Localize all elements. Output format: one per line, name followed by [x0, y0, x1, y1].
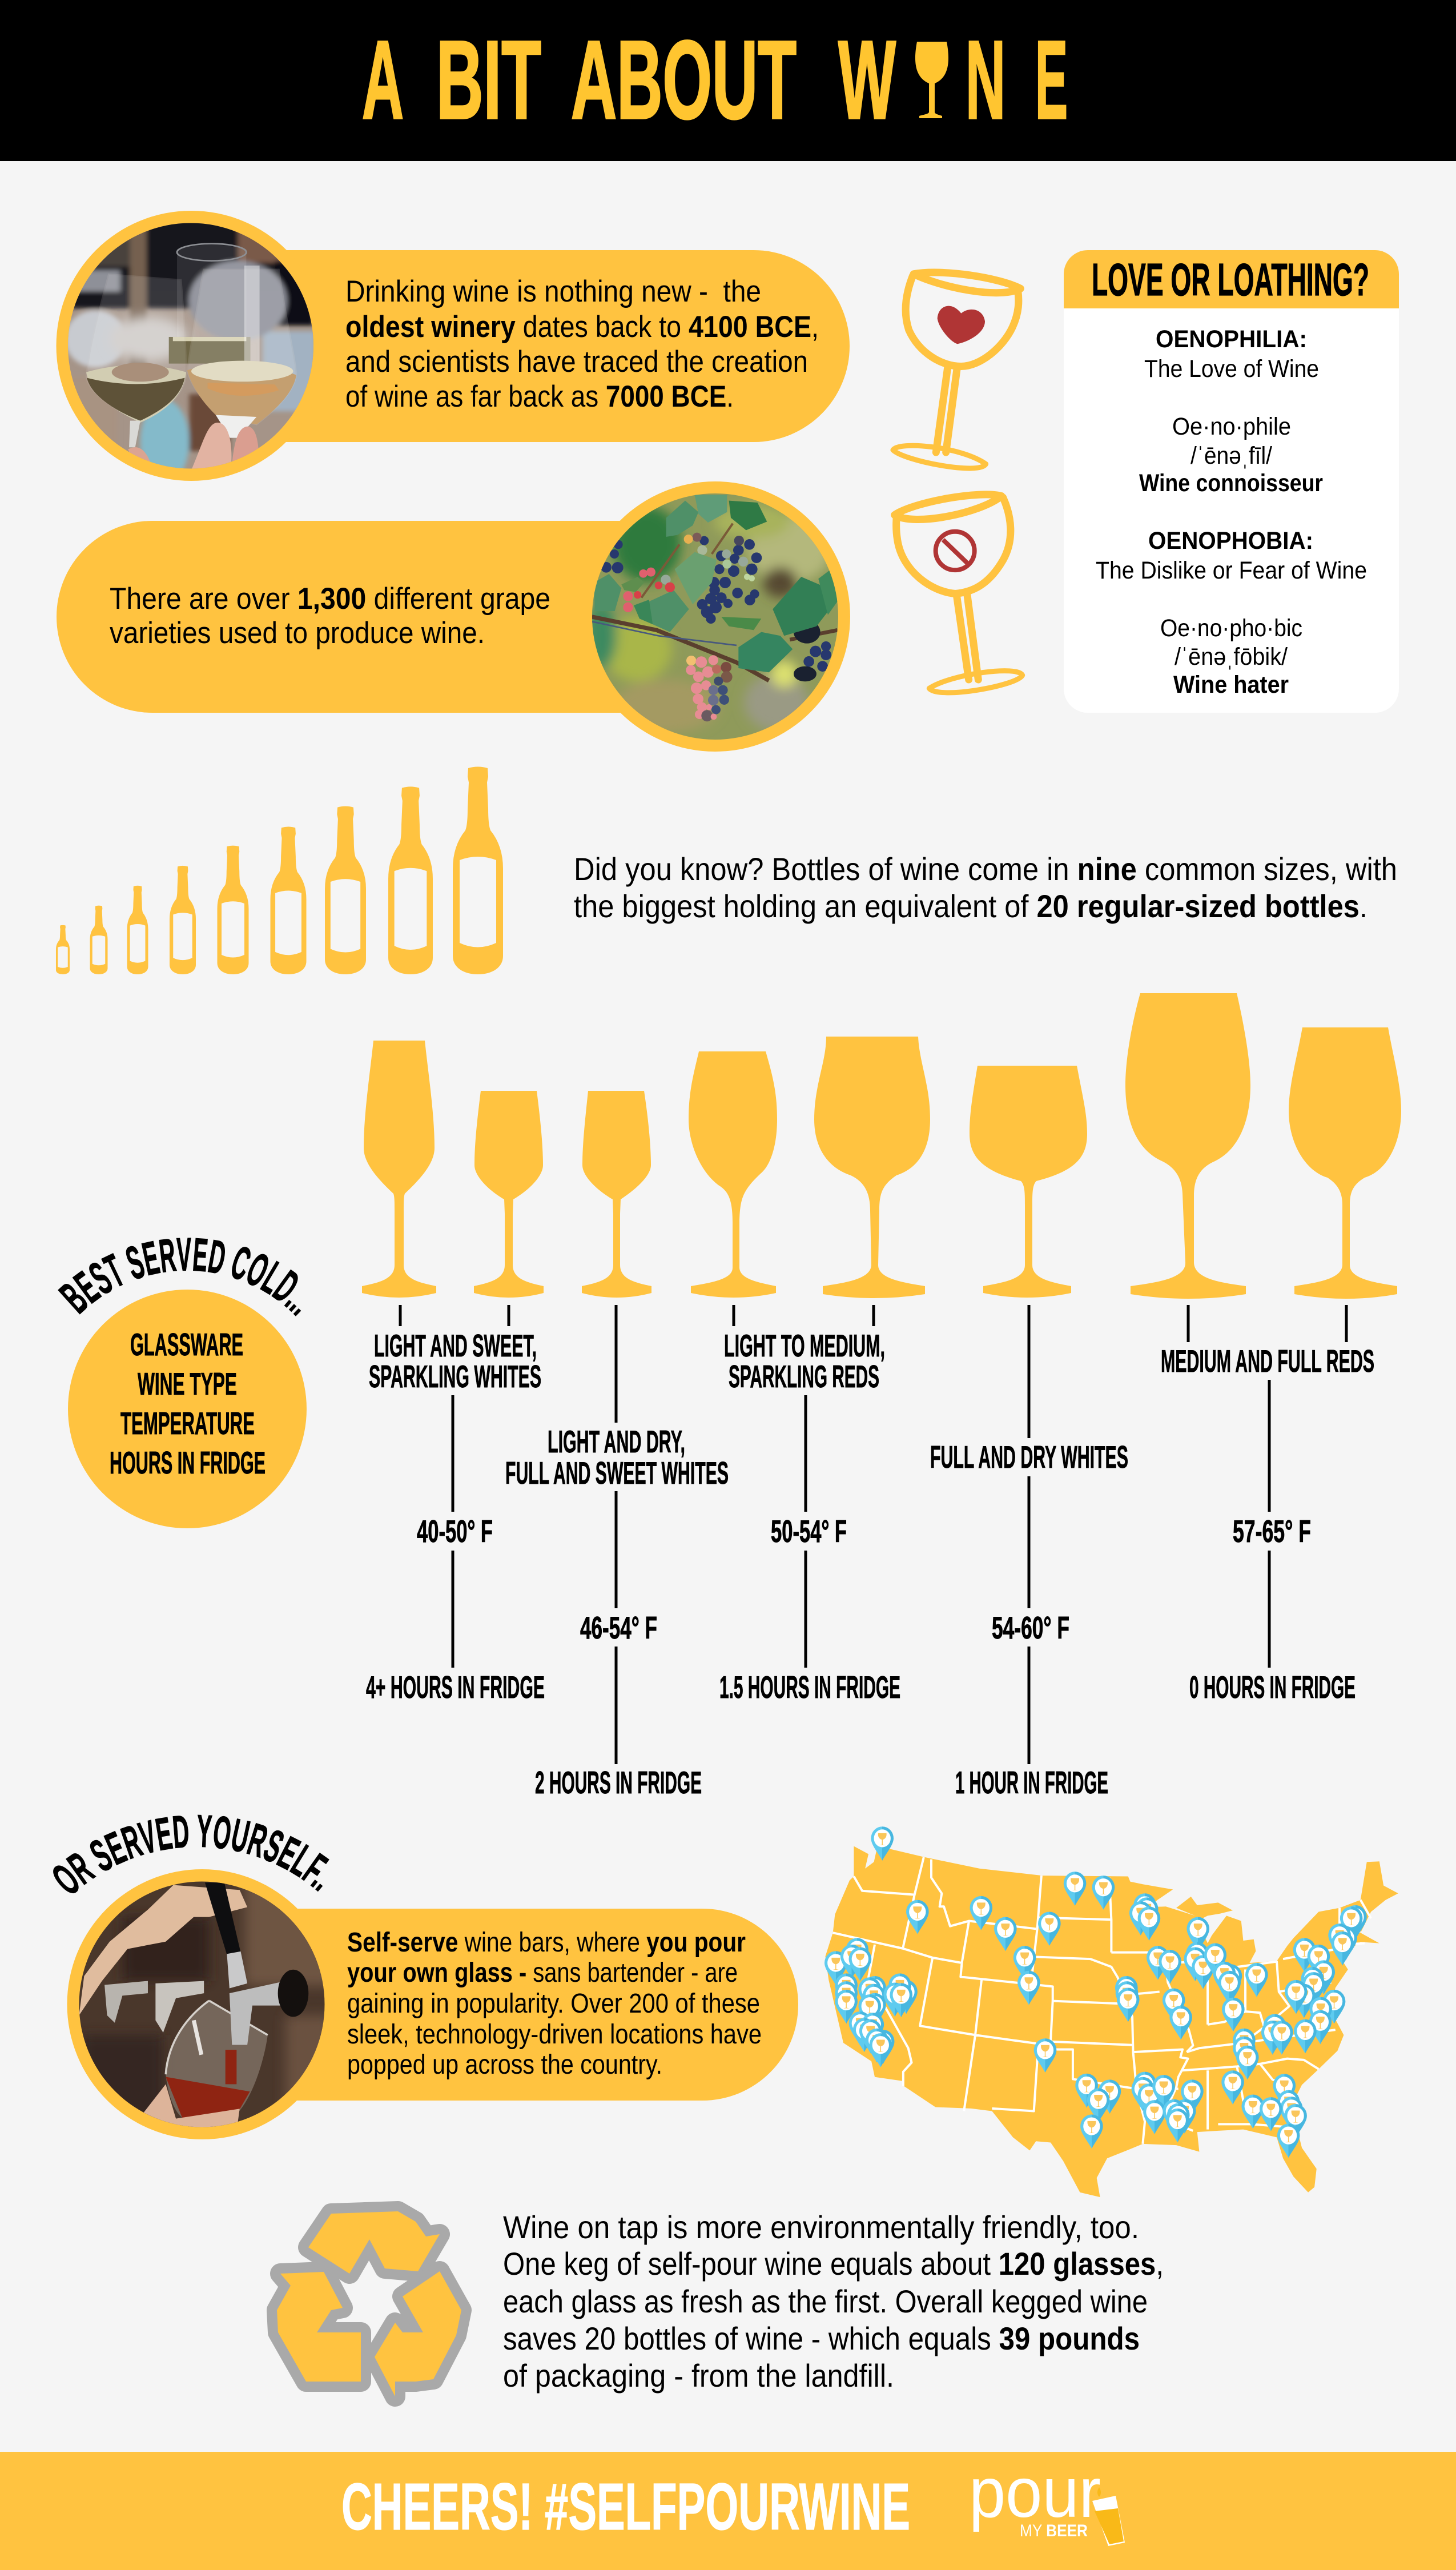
- icon: wine glass with prohibition sign: [895, 495, 1023, 693]
- text: oldest winery: of wine as far back as 7000 BCE.: [345, 380, 734, 413]
- text: grape varieties: varieties used to produce wine.: [110, 616, 485, 650]
- text: wine on tap: Wine on tap is more environmentally friendly, too.: [503, 2209, 1139, 2245]
- column: light and dry, full and sweet whites: FULL AND SWEET WHITES: [505, 1455, 729, 1491]
- column: light to medium, sparkling reds: LIGHT TO MEDIUM,: [724, 1328, 885, 1363]
- column: full and dry whites: [930, 1439, 1128, 1800]
- column: light and sweet, sparkling whites: SPARKLING WHITES: [369, 1359, 541, 1394]
- legend labels: [110, 1327, 266, 1480]
- legend labels: WINE TYPE: [138, 1366, 237, 1402]
- column: light and dry, full and sweet whites: 46-54° F: [580, 1610, 657, 1645]
- footer band: [0, 2452, 1456, 2570]
- column: light to medium, sparkling reds: 50-54° F: [771, 1513, 847, 1549]
- text: wine on tap: saves 20 bottles of wine - which equals 39 pounds: [503, 2320, 1140, 2356]
- text: oenophobia definition: /ˈēnəˌfōbik/: [1175, 643, 1288, 670]
- text: grape varieties: There are over 1,300 different grape: [110, 582, 550, 616]
- footer slogan: CHEERS! #SELFPOURWINE: [341, 2469, 910, 2544]
- leader lines: [400, 1305, 1346, 1764]
- text: wine on tap: each glass as fresh as the first. Overall kegged wine: [503, 2283, 1148, 2319]
- legend labels: GLASSWARE: [130, 1327, 243, 1362]
- bottles: nine sizes: [56, 766, 503, 974]
- text: oenophobia definition: Wine hater: [1173, 671, 1289, 698]
- text: self-serve wine bars: sleek, technology-driven locations have: [347, 2019, 762, 2050]
- heading: best served cold: BEST SERVED COLD...: [58, 1238, 301, 1316]
- text: grape varieties: [110, 582, 550, 650]
- column: light and dry, full and sweet whites: [505, 1424, 729, 1800]
- text: oldest winery: Drinking wine is nothing new - the: [345, 275, 761, 308]
- text: oldest winery: and scientists have traced the creation: [345, 345, 808, 379]
- icon: recycling symbol: [277, 2211, 461, 2396]
- legend oval: [68, 1290, 307, 1528]
- column: light and sweet, sparkling whites: 40-50° F: [417, 1513, 493, 1549]
- icon: wine glass with heart: [893, 272, 1020, 468]
- location pins: [824, 1826, 1367, 2158]
- column: light and dry, full and sweet whites: LIGHT AND DRY,: [548, 1424, 685, 1459]
- text: wine on tap: One keg of self-pour wine equals about 120 glasses,: [503, 2246, 1164, 2282]
- title: W: [838, 18, 896, 142]
- header band: E: [1035, 18, 1068, 142]
- column: light to medium, sparkling reds: SPARKLING REDS: [729, 1359, 879, 1394]
- text: oenophobia definition: [1096, 527, 1367, 698]
- heading: or served yourself: OR SERVED YOURSELF...: [53, 1815, 329, 1894]
- text: bottle sizes: [574, 851, 1397, 924]
- text: oenophobia definition: Oe·no·pho·bic: [1160, 615, 1302, 642]
- text: bottle sizes: Did you know? Bottles of wine come in nine common sizes, with: [574, 851, 1397, 887]
- column: full and dry whites: FULL AND DRY WHITES: [930, 1439, 1128, 1475]
- text: oldest winery: [345, 275, 819, 413]
- column: medium and full reds: [1161, 1343, 1374, 1705]
- text: self-serve wine bars: popped up across the country.: [347, 2050, 662, 2080]
- title: A: [362, 18, 404, 142]
- logo: pour my beer: pour: [969, 2453, 1101, 2532]
- title: BIT: [436, 18, 541, 142]
- legend labels: HOURS IN FRIDGE: [110, 1445, 266, 1480]
- panel: grape varieties: [57, 481, 850, 752]
- text: oenophilia definition: The Love of Wine: [1144, 355, 1319, 383]
- text: wine on tap: of packaging - from the landfill.: [503, 2358, 894, 2394]
- glassware silhouettes: [362, 993, 1401, 1299]
- text: self-serve wine bars: Self-serve wine bars, where you pour: [347, 1928, 746, 1958]
- column: light and sweet, sparkling whites: LIGHT AND SWEET,: [374, 1328, 537, 1363]
- text: oenophilia definition: OENOPHILIA:: [1156, 326, 1307, 353]
- title: ABOUT: [571, 18, 797, 142]
- column: full and dry whites: 54-60° F: [992, 1610, 1069, 1645]
- column: full and dry whites: 1 HOUR IN FRIDGE: [955, 1765, 1108, 1800]
- photo: grapes on the vine: [586, 491, 841, 742]
- panel: oldest winery: [55, 211, 850, 484]
- column: light and sweet, sparkling whites: [366, 1328, 545, 1705]
- text: self-serve wine bars: your own glass - sans bartender - are: [347, 1958, 738, 1988]
- column: light to medium, sparkling reds: 1.5 HOURS IN FRIDGE: [719, 1669, 900, 1705]
- text: oenophobia definition: OENOPHOBIA:: [1148, 527, 1313, 555]
- text: oenophilia definition: Oe·no·phile: [1172, 413, 1291, 440]
- photo: clinking wine glasses: [68, 223, 313, 468]
- photo: pouring wine from a tap: [79, 1881, 324, 2127]
- title: N: [966, 18, 1005, 142]
- text: oldest winery: oldest winery dates back to 4100 BCE,: [345, 310, 819, 344]
- text: oenophilia definition: Wine connoisseur: [1139, 469, 1323, 497]
- text: oenophilia definition: /ˈēnəˌfīl/: [1190, 442, 1272, 469]
- column: light and sweet, sparkling whites: 4+ HOURS IN FRIDGE: [366, 1669, 545, 1705]
- panel: love or loathing: [1064, 250, 1399, 713]
- text: self-serve wine bars: gaining in popularity. Over 200 of these: [347, 1989, 760, 2019]
- text: oenophilia definition: [1139, 326, 1323, 497]
- text: self-serve wine bars: [347, 1928, 762, 2080]
- column: medium and full reds: 57-65° F: [1233, 1513, 1311, 1549]
- title: [362, 18, 1068, 142]
- text: wine on tap: [503, 2209, 1164, 2394]
- header band: [0, 0, 1456, 161]
- column: light and dry, full and sweet whites: 2 HOURS IN FRIDGE: [535, 1765, 702, 1800]
- logo: pour my beer: MY BEER: [1020, 2521, 1088, 2540]
- column: light to medium, sparkling reds: [719, 1328, 900, 1705]
- panel: self-serve wine bars: [67, 1869, 798, 2139]
- map: US self-pour locations: [824, 1826, 1398, 2197]
- legend labels: TEMPERATURE: [120, 1406, 255, 1441]
- text: bottle sizes: the biggest holding an equivalent of 20 regular-sized bottles.: [574, 888, 1367, 924]
- text: oenophobia definition: The Dislike or Fear of Wine: [1096, 557, 1367, 584]
